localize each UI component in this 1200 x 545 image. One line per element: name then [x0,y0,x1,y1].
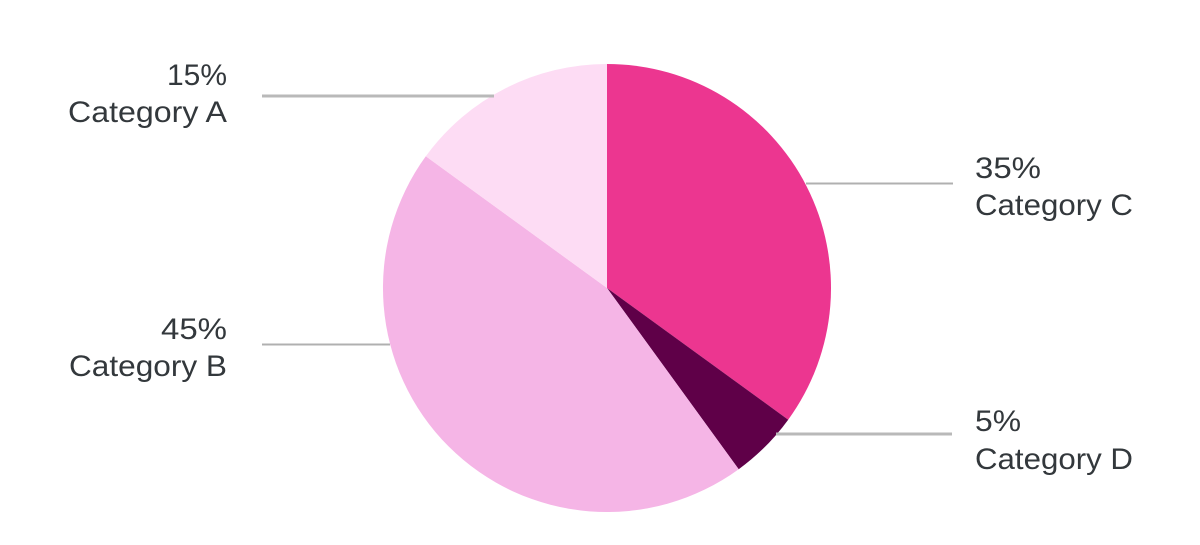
slice: Category D 5% [607,288,788,469]
label: Category D: 5% [975,405,1021,438]
label: Category C [975,152,1133,222]
label: Category D: Category D [975,443,1133,476]
label: Category A [68,59,227,129]
label: Category B [69,313,227,383]
leader line: Category D [776,432,952,436]
label: Category C: Category C [975,189,1133,222]
label: Category A: 15% [167,59,227,92]
label: Category C: 35% [975,152,1041,185]
label: Category D [975,405,1133,476]
label: Category B: Category B [69,350,227,383]
slice: Category B 45% [383,156,739,512]
leader line: Category A [262,94,494,98]
slice: Category C 35% [607,64,831,420]
leader line: Category C [806,182,953,184]
label: Category B: 45% [161,313,227,346]
label: Category A: Category A [68,96,227,129]
leader line: Category B [262,344,390,346]
slice: Category A 15% [426,64,607,288]
pie chart [383,64,831,512]
